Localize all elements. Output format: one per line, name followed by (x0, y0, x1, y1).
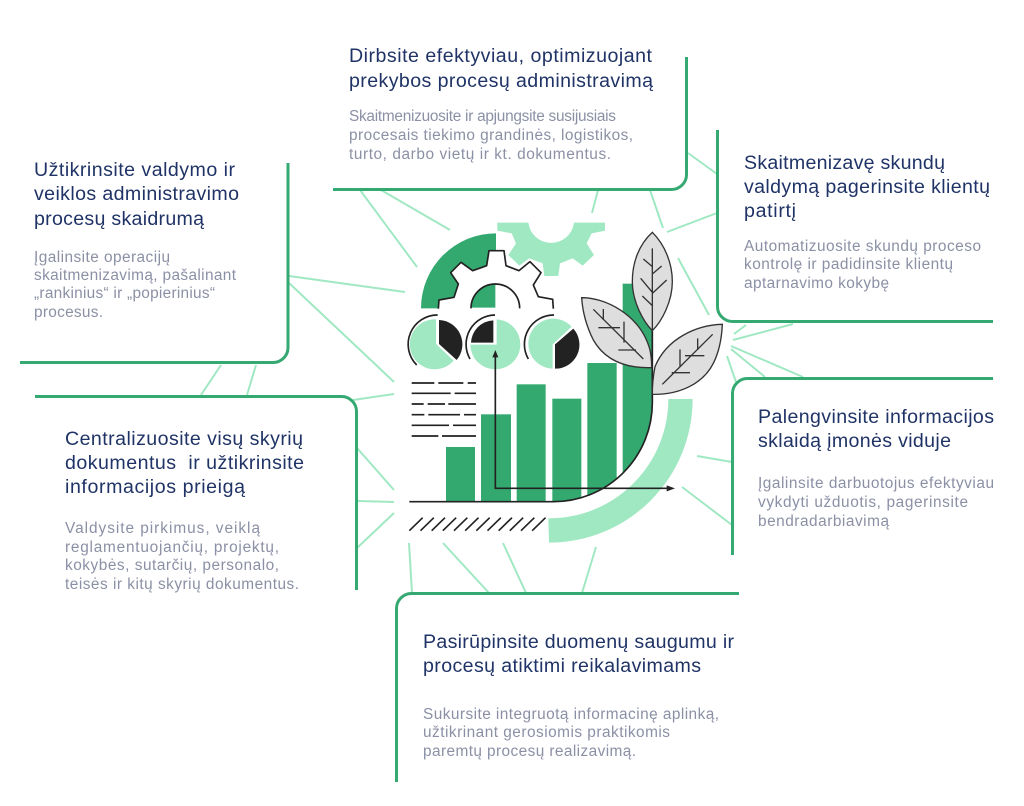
text block: „rankinius“ ir „popierinius“ (34, 285, 215, 302)
heading: informacijos prieigą (65, 476, 245, 498)
text block: Valdysite pirkimus, veiklą (65, 520, 260, 537)
panel border (732, 378, 993, 555)
panel: top process administration (333, 45, 687, 190)
heading: prekybos procesų administravimą (349, 70, 653, 92)
heading (34, 159, 239, 230)
panel border (717, 130, 993, 322)
text block: kontrolę ir padidinsite klientų (744, 256, 953, 273)
panel: bottom data security (396, 593, 739, 782)
text lines (412, 383, 476, 436)
heading: Centralizuosite visų skyrių (65, 428, 303, 450)
heading (758, 406, 994, 452)
panel: left transparency (20, 159, 288, 362)
icon: right leaf (652, 324, 722, 394)
heading: Užtikrinsite valdymo ir (34, 159, 235, 181)
text block: teisės ir kitų skyrių dokumentus. (65, 576, 299, 593)
pie chart 2 (466, 315, 520, 369)
text block: procesus. (34, 304, 103, 321)
heading: Dirbsite efektyviau, optimizuojant (349, 45, 653, 67)
panel border (396, 593, 739, 782)
text block: Automatizuosite skundų proceso (744, 238, 981, 255)
icon: left leaf (582, 298, 652, 368)
icon: green quarter ring (421, 233, 496, 308)
text block: procesais tiekimo grandinės, logistikos, (349, 127, 633, 144)
text block: paremtų procesų realizavimą. (423, 743, 636, 760)
panel border (35, 396, 357, 590)
pie chart 3 (524, 315, 579, 369)
arrow: axes (492, 350, 675, 491)
icon: light gear (497, 223, 605, 276)
text block: Įgalinsite darbuotojus efektyviau (758, 475, 994, 492)
panel: right complaints (717, 130, 993, 322)
text block: Skaitmenizuosite ir apjungsite susijusiais (349, 108, 616, 125)
panel: right information sharing (732, 378, 994, 555)
heading (423, 631, 734, 677)
text block: Sukursite integruotą informacinę aplinką, (423, 706, 719, 723)
text block: turto, darbo vietų ir kt. dokumentus. (349, 146, 611, 163)
text block: reglamentuojančių, projektų, (65, 539, 279, 556)
text block (744, 238, 981, 292)
text block: užtikrinant gerosiomis praktikomis (423, 724, 670, 741)
text block (758, 475, 994, 530)
icon: outline gear (438, 251, 553, 309)
heading: patirtį (744, 200, 796, 222)
heading: Palengvinsite informacijos (758, 406, 994, 428)
text block: Įgalinsite operacijų (34, 249, 170, 266)
heading: valdymą pagerinsite klientų (744, 176, 990, 198)
heading (744, 152, 990, 222)
heading (349, 45, 653, 92)
heading: veiklos administravimo (34, 183, 239, 205)
heading: procesų atiktimi reikalavimams (423, 655, 701, 677)
hatching (409, 518, 545, 531)
text block (349, 108, 633, 163)
panel border (20, 163, 288, 362)
text block: vykdyti užduotis, pagerinsite (758, 494, 968, 511)
connector rays (201, 153, 803, 593)
text block (423, 706, 719, 760)
text block: bendradarbiavimą (758, 513, 889, 530)
text block: skaitmenizavimą, pašalinant (34, 267, 237, 284)
heading: Pasirūpinsite duomenų saugumu ir (423, 631, 734, 653)
panel border (333, 57, 687, 190)
curve and ground line (409, 330, 652, 502)
central illustration (408, 223, 722, 543)
text block (34, 249, 237, 321)
heading: procesų skaidrumą (34, 208, 204, 230)
light arc (548, 399, 693, 543)
text block (65, 520, 299, 593)
text block: aptarnavimo kokybę (744, 275, 889, 292)
icon: top leaf (632, 232, 672, 331)
heading: sklaidą įmonės viduje (758, 430, 951, 452)
heading: dokumentus ir užtikrinsite (65, 452, 304, 474)
heading: Skaitmenizavę skundų (744, 152, 945, 174)
text block: kokybės, sutarčių, personalo, (65, 557, 279, 574)
pie chart 1 (408, 315, 462, 369)
heading (65, 428, 304, 498)
bar chart (446, 284, 652, 502)
panel: left documents (35, 396, 357, 593)
